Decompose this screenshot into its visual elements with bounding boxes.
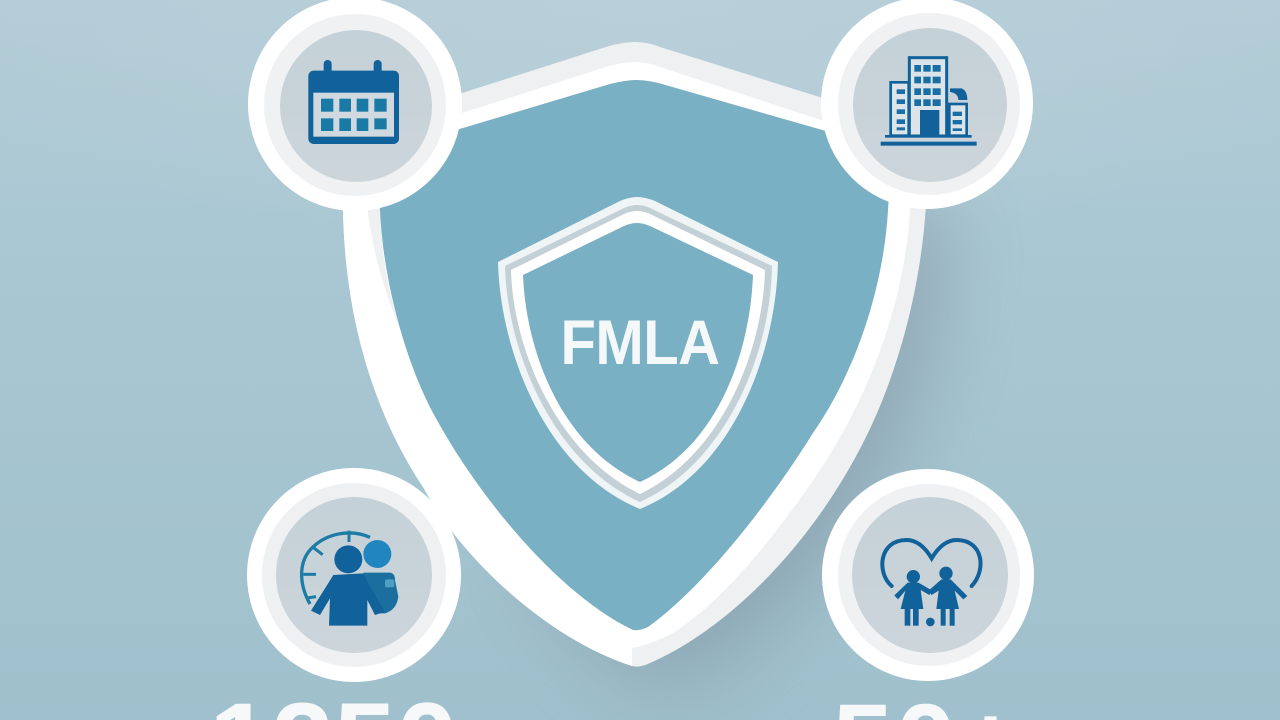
icon: office building xyxy=(881,58,977,146)
emblem outer line xyxy=(498,197,778,509)
main shield xyxy=(340,42,926,667)
emblem grey stripe xyxy=(505,205,772,502)
shield teal centre xyxy=(376,80,892,630)
shield left inner facet xyxy=(367,205,402,333)
circle: calendar xyxy=(248,0,462,211)
circle: employee with hours dial xyxy=(247,468,461,682)
circle: family care xyxy=(822,469,1034,681)
shield drop shadow xyxy=(520,200,946,690)
icon: person with clock dial xyxy=(302,531,398,626)
emblem teal centre xyxy=(523,223,753,482)
emblem white band xyxy=(511,211,765,494)
icon: calendar xyxy=(308,60,399,144)
shield white face xyxy=(340,62,912,666)
inner shield emblem xyxy=(498,197,778,509)
circle: office building xyxy=(821,0,1033,209)
icon: heart and two children xyxy=(882,540,981,626)
shield outer bevel xyxy=(340,42,926,667)
FMLA label: FMLA xyxy=(560,307,720,378)
